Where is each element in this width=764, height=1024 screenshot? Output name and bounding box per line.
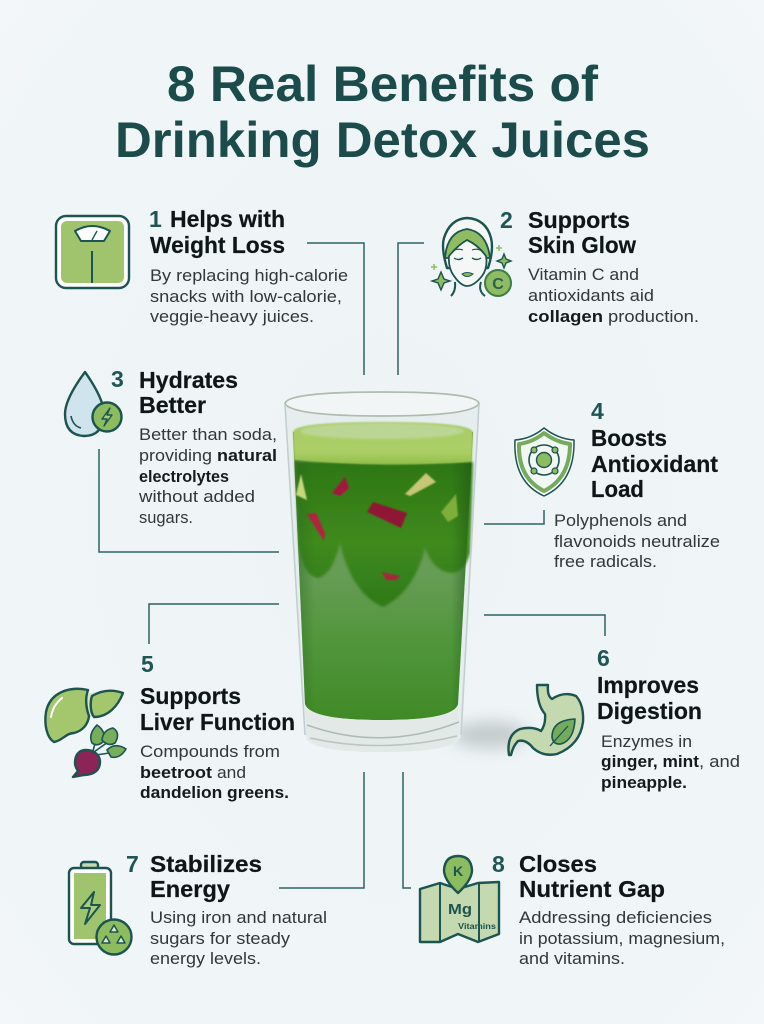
number and heading: 3 [111, 366, 124, 392]
text: free radicals. [554, 552, 657, 571]
icon: map with pin: Mg [448, 901, 472, 918]
text: sugars for steady [150, 929, 291, 948]
text: pineapple. [601, 773, 687, 792]
number and heading: Digestion [597, 698, 702, 724]
number and heading: Supports [528, 207, 630, 233]
number and heading: 5 [141, 651, 154, 677]
text: Vitamin C and [528, 265, 639, 284]
text: providing [139, 446, 212, 465]
icon: battery with minerals [69, 862, 132, 954]
text: ginger, mint [601, 752, 699, 771]
number and heading: Stabilizes [150, 851, 262, 877]
icon: bathroom scale [56, 216, 129, 288]
benefit 6 [508, 645, 740, 792]
number and heading: 1 [149, 206, 162, 232]
number and heading: 8 [492, 851, 505, 877]
text [138, 425, 277, 527]
number and heading [111, 366, 238, 418]
benefit 5 [45, 651, 295, 802]
icon: map with pin: K [453, 863, 463, 879]
number and heading: 7 [126, 851, 139, 877]
number and heading [149, 206, 285, 258]
text: Using iron and natural [150, 908, 327, 927]
title [115, 56, 650, 168]
juice glass [285, 392, 528, 752]
benefit 7 [69, 851, 327, 968]
number and heading [500, 207, 636, 258]
text: , and [699, 752, 740, 771]
text [528, 265, 699, 326]
number and heading: Helps with [170, 206, 285, 232]
benefit 3 [65, 366, 277, 527]
number and heading: Liver Function [140, 709, 295, 735]
text: Polyphenols and [554, 511, 687, 530]
text: Addressing deficiencies [519, 908, 712, 927]
text: Compounds from [140, 742, 280, 761]
text: antioxidants aid [528, 286, 654, 305]
number and heading [492, 851, 665, 902]
benefit 4 [515, 398, 720, 571]
title: Drinking Detox Juices [115, 112, 650, 168]
text: and [217, 763, 246, 782]
number and heading: Weight Loss [150, 232, 285, 258]
text: dandelion greens. [140, 783, 289, 802]
text [601, 732, 740, 792]
text [150, 266, 348, 326]
text: production. [608, 307, 699, 326]
icon: shield [515, 428, 574, 496]
icon: face with vitamin C: C [492, 276, 504, 293]
number and heading: Skin Glow [528, 232, 636, 258]
connector lines [99, 243, 605, 888]
text [150, 908, 327, 968]
text: snacks with low-calorie, [150, 287, 342, 306]
benefit 2 [431, 207, 699, 326]
number and heading: Antioxidant [591, 451, 718, 477]
icon: map with pin [420, 856, 499, 942]
text: beetroot [140, 763, 212, 782]
text [554, 511, 720, 571]
title: 8 Real Benefits of [167, 56, 598, 112]
text: Better than soda, [139, 425, 277, 444]
text: sugars. [139, 508, 193, 527]
number and heading: 6 [597, 645, 610, 671]
icon: liver and beetroot [45, 689, 126, 777]
text: flavonoids neutralize [554, 532, 720, 551]
icon: water drop with bolt [65, 372, 122, 436]
number and heading: Boosts [591, 425, 667, 451]
text: natural [217, 446, 277, 465]
number and heading [140, 651, 295, 735]
text: without added [138, 487, 255, 506]
number and heading: Energy [150, 876, 230, 902]
text: collagen [528, 307, 603, 326]
number and heading: Nutrient Gap [519, 876, 665, 902]
text: Enzymes in [601, 732, 692, 751]
text: energy levels. [150, 949, 261, 968]
text [519, 908, 725, 968]
text: electrolytes [139, 467, 229, 486]
number and heading: 2 [500, 207, 513, 233]
number and heading: Closes [519, 851, 597, 877]
text [140, 742, 289, 802]
number and heading [597, 645, 702, 724]
number and heading: Improves [597, 672, 699, 698]
benefit 1 [56, 206, 348, 326]
number and heading: Supports [140, 683, 241, 709]
number and heading: 4 [591, 398, 604, 424]
number and heading: Better [139, 392, 206, 418]
number and heading [126, 851, 262, 902]
icon: stomach with leaf [508, 685, 583, 755]
text: By replacing high-calorie [150, 266, 348, 285]
number and heading: Hydrates [139, 367, 238, 393]
number and heading: Load [591, 476, 644, 502]
benefit 8 [420, 851, 725, 968]
icon: face with vitamin C [431, 218, 511, 296]
text: in potassium, magnesium, [519, 929, 725, 948]
icon: map with pin: Vitamins [458, 922, 497, 931]
text: veggie-heavy juices. [150, 307, 314, 326]
number and heading [591, 398, 718, 502]
text: and vitamins. [519, 949, 625, 968]
